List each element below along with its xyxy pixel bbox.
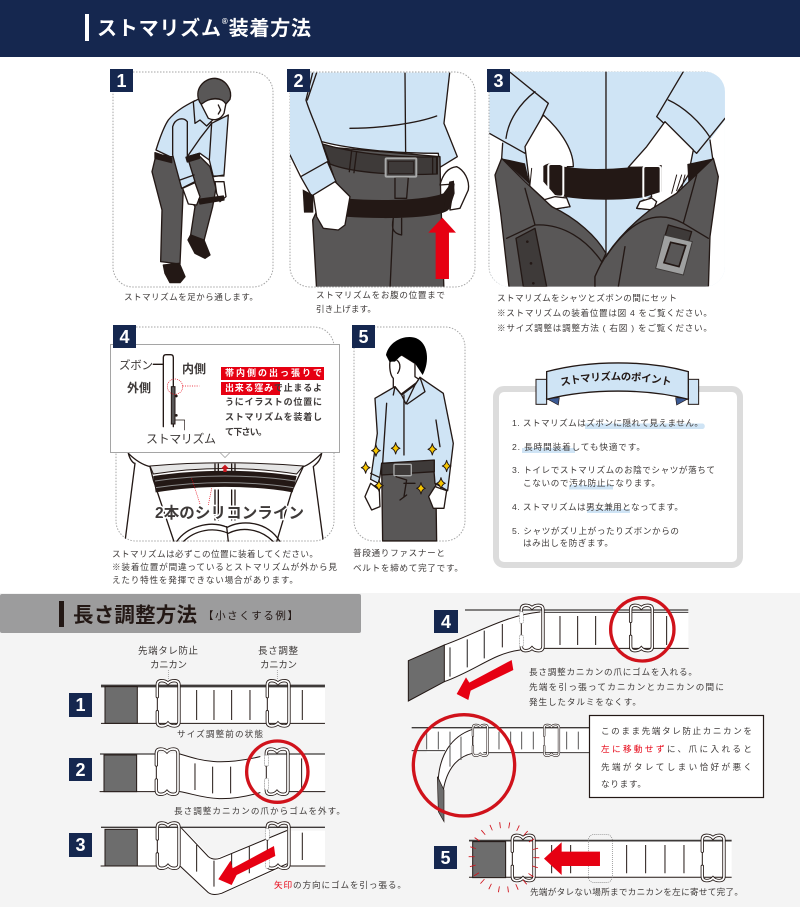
caption 3 (497, 292, 712, 333)
title: ストマリズム (97, 18, 221, 40)
callout: cross-section: ストマリズム (146, 431, 216, 446)
list of points: こないので汚れ防止になります。 (523, 477, 660, 488)
ribbon heading: ストマリズムのポイント (561, 371, 670, 386)
caption: hook and tighten: 発生したタルミをなくす。 (529, 696, 641, 707)
part labels: カニカン (260, 660, 297, 671)
caption: hook and tighten: 長さ調整カニカンの爪にゴムを入れる。 (529, 666, 697, 677)
badge 2 (287, 69, 310, 92)
panel 5: finished (352, 325, 465, 573)
caption: pull in arrow direction: 矢印の方向にゴムを引っ張る。 (274, 879, 406, 890)
callout: cross-section: 外側 (127, 380, 151, 395)
caption 4: えたり特性を発揮できない場合があります。 (112, 574, 298, 585)
warning box: このまま先端タレ防止カニカンを (601, 725, 752, 736)
caption: before adjustment: サイズ調整前の状態 (177, 728, 263, 739)
warning box: 先端がタレてしまい恰好が悪く (601, 761, 752, 772)
icon: hands setting strap (489, 72, 725, 290)
caption: hook and tighten (529, 666, 724, 707)
callout: cross-section: ズボン (119, 358, 153, 372)
badge 5 (352, 325, 375, 348)
list of points (512, 417, 715, 548)
caption 4: ※装着位置が間違っているとストマリズムが外から見 (112, 561, 337, 572)
panel 3: set between shirt and trousers (487, 69, 725, 333)
part labels: カニカン (150, 660, 187, 671)
caption 5: ベルトを締めて完了です。 (353, 562, 463, 573)
belt step 1 (101, 670, 325, 726)
callout: cross-section: て下さい。 (225, 427, 267, 437)
part labels (138, 645, 298, 671)
red highlight labels (221, 367, 324, 395)
caption 4: ストマリズムは必ずこの位置に装着してください。 (112, 548, 318, 559)
caption: done: 先端がタレない場所までカニカンを左に寄せて完了。 (530, 886, 743, 897)
icon: man fully dressed (361, 337, 453, 541)
title: 装着方法 (229, 17, 311, 40)
diagram: trouser section (153, 355, 199, 430)
badge 1: 1 (116, 71, 127, 91)
badge 3: 3 (493, 71, 504, 91)
caption: remove rubber: 長さ調整カニカンの爪からゴムを外す。 (174, 805, 345, 816)
badge row 5 (434, 846, 457, 869)
caption 2: 引き上げます。 (316, 304, 376, 314)
badge row 3: 3 (75, 835, 86, 855)
callout: cross-section: 帯内側の出っ張りで (225, 367, 322, 378)
list highlights (522, 424, 705, 513)
belt step 5 (469, 825, 732, 890)
belt warning: sagging end (412, 715, 590, 822)
warning box: なります。 (601, 779, 646, 789)
panel 1: step through legs (110, 69, 273, 302)
badge row 4: 4 (441, 612, 451, 632)
list of points: 2. 長時間装着しても快適です。 (512, 441, 645, 452)
header bar (0, 0, 800, 57)
list of points: はみ出しを防ぎます。 (523, 537, 613, 548)
belt step 4 (408, 598, 688, 701)
caption 2: ストマリズムをお腹の位置まで (316, 289, 445, 300)
part labels: 長さ調整 (258, 645, 298, 657)
badge row 1: 1 (75, 695, 86, 715)
caption 3: ※サイズ調整は調整方法 ( 右図 ) をご覧ください。 (497, 322, 712, 333)
caption 3: ※ストマリズムの装着位置は図 4 をご覧ください。 (497, 307, 712, 318)
panel 2: pull up to waist (287, 69, 475, 314)
badge row 3 (69, 833, 92, 857)
callout: cross-section: うにイラストの位置に (225, 396, 322, 407)
badge 1 (110, 69, 133, 92)
belt step 3 (101, 823, 325, 895)
badge row 2: 2 (75, 760, 86, 780)
warning box (590, 716, 764, 798)
section heading: 長さ調整方法 (73, 604, 198, 627)
icon: man pulling belt up from feet (152, 78, 231, 283)
section heading: 【小さくする例】 (203, 609, 298, 622)
caption 3: ストマリズムをシャツとズボンの間にセット (497, 292, 677, 303)
badge 4 (113, 325, 136, 348)
icon: inside waist view (125, 453, 323, 542)
panel 4: wearing position (110, 325, 340, 585)
badge row 2 (69, 758, 92, 781)
list of points: 1. ストマリズムはズボンに隠れて見えません。 (512, 417, 703, 428)
callout: cross-section: 出来る窪みで止まるよ (225, 382, 322, 393)
badge 5: 5 (358, 327, 369, 347)
caption 4 (112, 548, 337, 585)
badge row 1 (69, 693, 92, 717)
title: ® (222, 17, 228, 26)
panel: points (493, 362, 743, 568)
callout: cross-section: 内側 (182, 361, 206, 376)
badge 4: 4 (119, 327, 130, 347)
list of points: 4. ストマリズムは男女兼用となってます。 (512, 501, 683, 512)
list of points: 5. シャツがズリ上がったりズボンからの (512, 525, 679, 536)
caption 5 (353, 547, 463, 573)
badge 3 (487, 69, 510, 92)
label: silicone lines: 2本のシリコンライン (155, 504, 304, 522)
badge row 5: 5 (440, 848, 451, 868)
section: length adjustment (0, 593, 800, 907)
badge row 4 (434, 610, 458, 633)
caption 1: ストマリズムを足から通します。 (124, 291, 258, 302)
caption 2 (316, 289, 445, 314)
ribbon heading (536, 362, 700, 406)
callout: cross-section: ストマリズムを装着し (225, 411, 322, 422)
icon: waist with pull-up arrow (290, 70, 469, 290)
list of points: 3. トイレでストマリズムのお陰でシャツが落ちて (512, 464, 715, 475)
warning box: 左に移動せず に、爪に入れると (601, 743, 752, 754)
belt step 2 (100, 741, 325, 802)
part labels: 先端タレ防止 (138, 645, 198, 657)
section heading (0, 594, 361, 633)
badge 2: 2 (293, 71, 304, 91)
callout: cross-section (110, 344, 340, 458)
caption: hook and tighten: 先端を引っ張ってカニカンとカニカンの間に (529, 681, 724, 692)
caption 5: 普段通りファスナーと (353, 547, 445, 558)
